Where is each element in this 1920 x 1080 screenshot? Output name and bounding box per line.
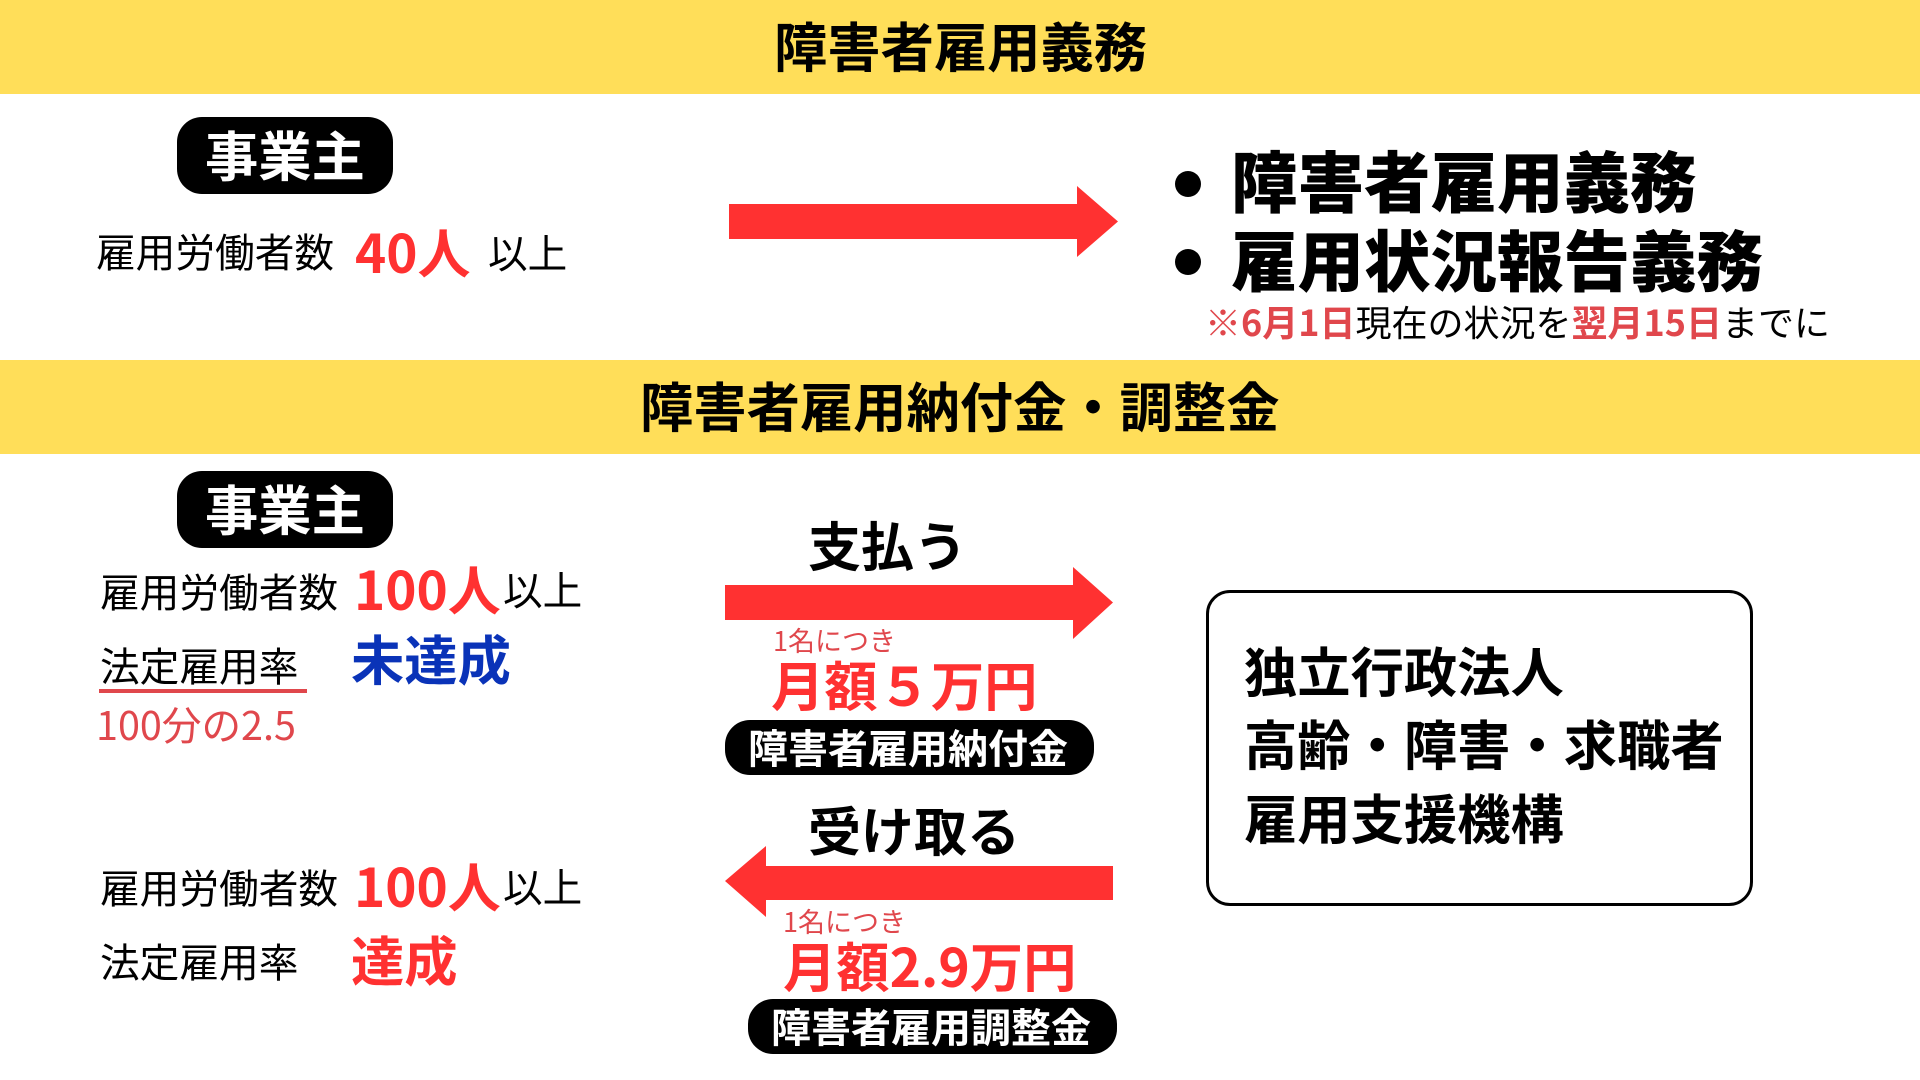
label: 雇用労働者数 [96, 222, 334, 279]
rate label: 法定雇用率 [100, 636, 298, 693]
heading text: 障害者雇用義務 [774, 6, 1147, 83]
organization line 2: 高齢・障害・求職者 [1244, 704, 1724, 781]
organization box [1206, 590, 1753, 906]
organization line 1: 独立行政法人 [1244, 631, 1564, 708]
obligation 2: 雇用状況報告義務 [1231, 210, 1763, 306]
label: 雇用労働者数 [100, 562, 338, 619]
status: 達成 [351, 920, 458, 997]
label: 雇用労働者数 [100, 858, 338, 915]
levy amount: 月額５万円 [771, 645, 1037, 722]
heading band: levy and adjustment [0, 360, 1920, 454]
heading text: 障害者雇用納付金・調整金 [640, 366, 1280, 443]
suffix: 以上 [503, 560, 582, 617]
adjustment badge [748, 999, 1117, 1054]
badge text: 事業主 [205, 469, 365, 546]
receive label: 受け取る [808, 791, 1020, 867]
condition: 40 workers or more [96, 213, 567, 289]
suffix: 以上 [488, 223, 567, 280]
pay label: 支払う [808, 506, 967, 582]
condition: rate not achieved [96, 550, 582, 752]
suffix: 以上 [503, 857, 582, 914]
badge text: 障害者雇用納付金 [748, 717, 1068, 775]
obligations list [1175, 131, 1830, 347]
value: 100人 [354, 550, 501, 626]
rate label: 法定雇用率 [100, 932, 298, 989]
condition: rate achieved [100, 847, 582, 997]
employer badge (bottom) [177, 471, 393, 548]
bullet 2 [1175, 249, 1201, 275]
badge text: 事業主 [205, 115, 365, 192]
employer badge (top) [177, 117, 393, 194]
status: 未達成 [351, 619, 511, 696]
obligation 1: 障害者雇用義務 [1231, 131, 1696, 227]
deadline note: ※6月1日現在の状況を翌月15日までに [1205, 295, 1830, 347]
organization line 3: 雇用支援機構 [1244, 778, 1564, 855]
statutory rate: 100分の2.5 [96, 695, 296, 752]
adjustment amount: 月額2.9万円 [783, 926, 1076, 1003]
levy badge [725, 720, 1094, 775]
value: 100人 [354, 847, 501, 923]
underline [99, 689, 307, 693]
badge text: 障害者雇用調整金 [771, 996, 1091, 1054]
per person note: levy: 1名につき [773, 620, 896, 659]
bullet 1 [1175, 171, 1201, 197]
heading band: employment obligation [0, 0, 1920, 94]
per person note: adjustment: 1名につき [783, 901, 906, 940]
value: 40人 [355, 213, 471, 289]
